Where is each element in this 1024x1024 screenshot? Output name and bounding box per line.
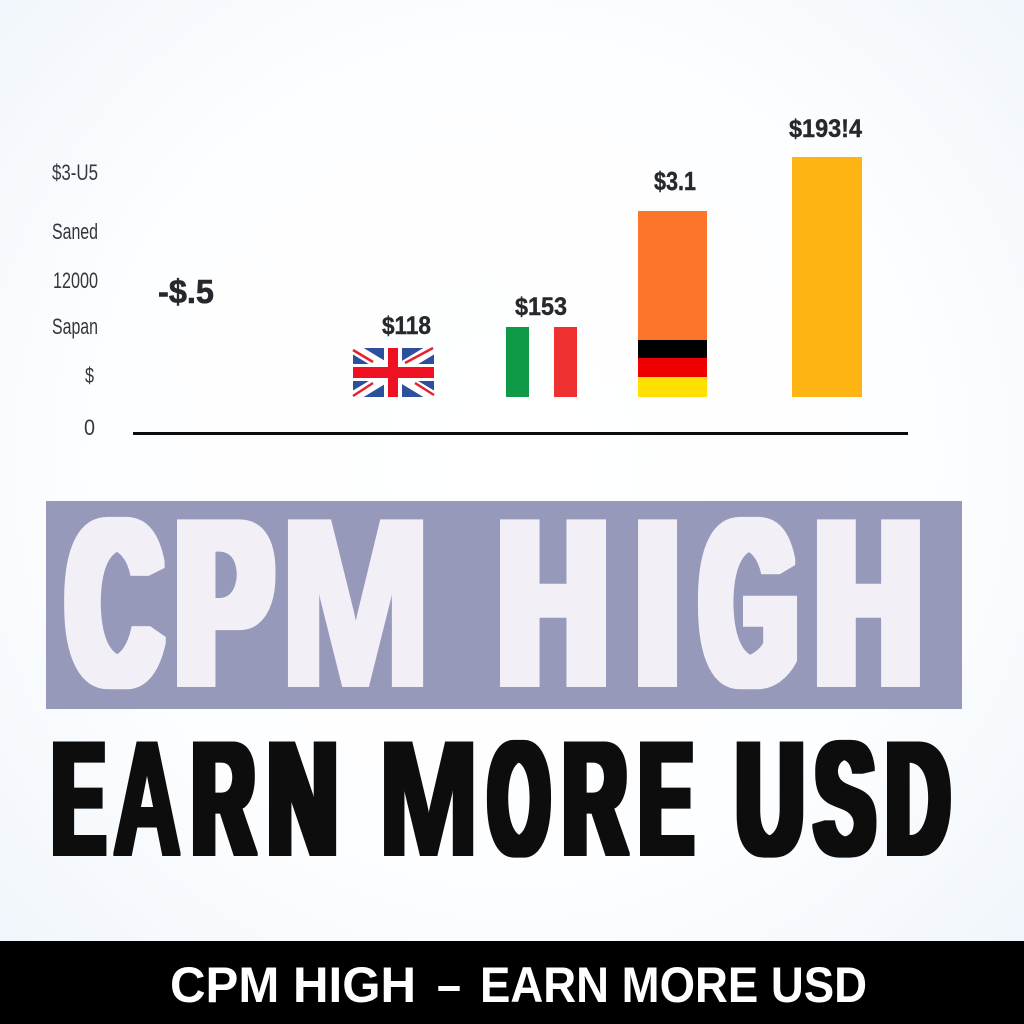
footer strip [0, 941, 1024, 1024]
subheadline: S [815, 708, 875, 889]
subheadline: A [114, 707, 181, 889]
headline banner [46, 471, 962, 735]
flag: Italy [506, 327, 577, 397]
subheadline: M [378, 709, 479, 890]
y-axis labels: Saned [52, 219, 98, 244]
subheadline: E [640, 710, 693, 890]
headline banner: H [499, 472, 607, 734]
headline banner: C [68, 473, 160, 735]
footer strip: – [437, 957, 461, 1013]
bar: top bar [792, 157, 862, 397]
value label: Italy: $153 [515, 293, 567, 321]
headline banner: G [702, 471, 795, 734]
y-axis labels: 12000 [53, 268, 98, 293]
value label: UK: $118 [382, 312, 431, 340]
headline banner: H [816, 472, 921, 735]
headline banner: I [637, 472, 678, 734]
subheadline: R [192, 707, 255, 889]
chart: bars by country [133, 115, 908, 435]
y-axis labels: $ [85, 363, 94, 388]
headline banner: M [280, 472, 431, 734]
bar: Germany [638, 211, 707, 397]
subheadline: R [563, 708, 627, 889]
subheadline: E [53, 708, 104, 889]
y-axis labels: 0 [84, 415, 95, 440]
value label: Germany: $3.1 [654, 166, 696, 196]
axis baseline [133, 432, 908, 435]
subheadline: N [268, 709, 338, 890]
subheadline: U [736, 709, 804, 890]
subheadline: D [886, 708, 950, 889]
value label: first column: -$.5 [158, 273, 214, 310]
y-axis labels: Sapan [52, 314, 98, 339]
subheadline: O [489, 708, 549, 889]
value label: top bar: $193!4 [789, 115, 862, 143]
footer strip: EARN MORE USD [480, 957, 867, 1013]
y-axis labels: $3-U5 [52, 160, 98, 185]
y-axis labels [52, 160, 98, 440]
footer strip: CPM HIGH [170, 957, 416, 1013]
flag: United Kingdom [353, 348, 434, 397]
headline banner: P [176, 472, 271, 735]
subheadline [53, 707, 950, 890]
